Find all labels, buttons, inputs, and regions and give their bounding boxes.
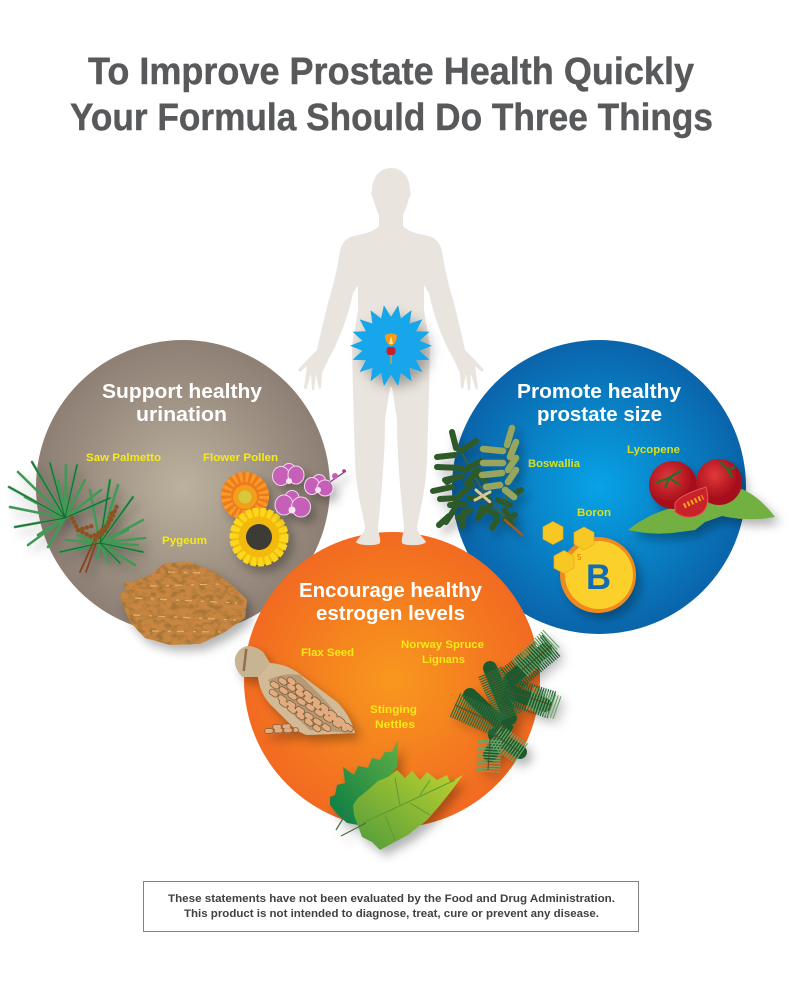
icon: pygeum bark pile — [119, 562, 247, 645]
icon: gerbera flower — [221, 472, 269, 520]
label: norway spruce lignans: Norway Spruce — [401, 639, 484, 651]
icon: boswellia branch — [433, 428, 522, 535]
icon: tomatoes and leaves — [628, 459, 775, 534]
label: stinging nettles: Stinging — [370, 704, 417, 716]
icon: spruce branch — [455, 638, 558, 772]
figure: human body silhouette — [298, 168, 484, 545]
label: stinging nettles: Nettles — [375, 719, 415, 731]
icon: nettle leaves — [330, 740, 463, 850]
heading: prostate size — [517, 381, 682, 426]
label: lycopene: Lycopene — [627, 444, 680, 456]
panel: promote healthy prostate size — [433, 340, 775, 634]
atomic number: 5 — [577, 553, 582, 562]
icon: blue starburst with prostate — [350, 305, 432, 386]
heading: prostate size: prostate size — [537, 404, 662, 426]
disclaimer box: This product is not intended to diagnose, treat, cure or prevent any disease. — [184, 908, 599, 920]
heading: estrogen levels — [299, 580, 483, 625]
heading: urination: Support healthy — [102, 381, 263, 403]
label: stinging nettles — [370, 704, 417, 731]
panel: support healthy urination — [9, 340, 346, 645]
label: pygeum: Pygeum — [162, 535, 207, 547]
label: flax seed: Flax Seed — [301, 647, 354, 659]
starburst — [350, 305, 432, 386]
title — [70, 51, 713, 139]
title: To Improve Prostate Health Quickly — [88, 51, 694, 93]
boron symbol: B — [586, 558, 611, 597]
label: flower pollen: Flower Pollen — [203, 452, 278, 464]
disclaimer box — [144, 882, 638, 932]
disclaimer box: These statements have not been evaluated by the Food and Drug Administration. — [168, 893, 615, 905]
icon: boron pill — [543, 522, 636, 613]
circle: orange — [244, 532, 540, 828]
icon: saw palmetto — [9, 462, 145, 572]
heading: estrogen levels: Encourage healthy — [299, 580, 483, 602]
heading: estrogen levels: estrogen levels — [316, 603, 465, 625]
heading: urination — [102, 381, 263, 426]
title: Your Formula Should Do Three Things — [70, 97, 713, 139]
label: norway spruce lignans: Lignans — [422, 654, 465, 666]
icon: flax seed scoop — [235, 646, 355, 735]
icon: hexagons — [543, 522, 594, 574]
label: norway spruce lignans — [401, 639, 484, 666]
circle: brown — [36, 340, 330, 634]
heading: prostate size: Promote healthy — [517, 381, 682, 403]
label: boswallia: Boswallia — [528, 458, 581, 470]
heading: urination: urination — [136, 404, 227, 426]
icon: sunflower — [231, 509, 287, 565]
label: boron: Boron — [577, 507, 611, 519]
panel: encourage healthy estrogen levels — [235, 532, 558, 850]
prostate — [385, 334, 397, 364]
circle: blue — [452, 340, 746, 634]
label: saw palmetto: Saw Palmetto — [86, 452, 161, 464]
icon: orchids — [272, 464, 346, 517]
